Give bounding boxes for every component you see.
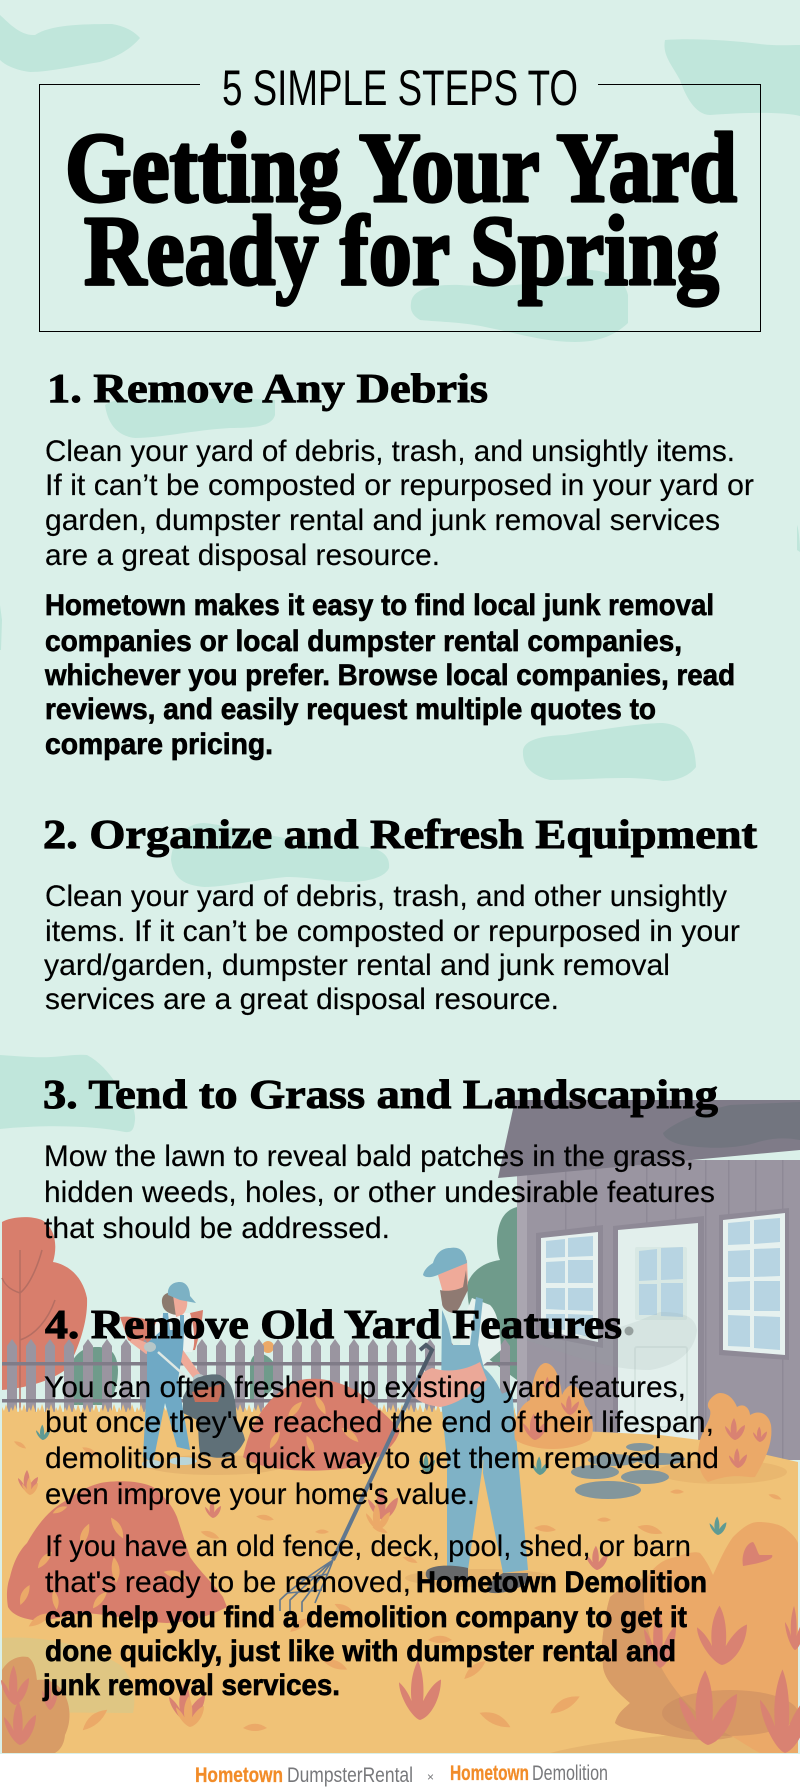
kicker: 5 simple steps to: 5 SIMPLE STEPS TO — [222, 60, 578, 116]
right window — [719, 1208, 789, 1360]
section 4 paragraph 2: If you have an old fence, deck, pool, shed, or barn — [45, 1530, 691, 1563]
section 4: remove old yard features — [42, 1301, 719, 1702]
section 2 paragraph: services are a great disposal resource. — [45, 983, 559, 1016]
section 1 paragraph: garden, dumpster rental and junk removal services — [45, 504, 720, 537]
section 3 paragraph: Mow the lawn to reveal bald patches in the grass, — [44, 1140, 694, 1173]
picket fence — [2, 1339, 517, 1412]
section 4 paragraph 1 — [44, 1371, 719, 1511]
door handle — [624, 1326, 634, 1336]
section 1 paragraph: If it can’t be composted or repurposed in your yard or — [45, 469, 754, 502]
section 1 paragraph: Clean your yard of debris, trash, and unsightly items. — [45, 435, 735, 468]
green bushes — [65, 1207, 517, 1405]
orange shrubs near house — [514, 1363, 771, 1482]
logo: hometown dumpster rental — [195, 1764, 413, 1787]
red tree — [2, 1217, 87, 1410]
roof — [498, 1100, 800, 1178]
background blobs — [0, 15, 800, 1132]
section 4 paragraph 1: even improve your home's value. — [45, 1478, 475, 1511]
section 1 bold callout — [44, 589, 735, 761]
door — [525, 1216, 704, 1445]
gardener man — [280, 1248, 528, 1613]
house — [498, 1100, 800, 1460]
scattered leaves — [13, 1439, 782, 1733]
section 4 heading: 4. Remove Old Yard Features — [45, 1301, 622, 1347]
title frame — [40, 84, 760, 332]
section 2 paragraph: Clean your yard of debris, trash, and other unsightly — [45, 880, 727, 913]
section 1 bold callout: compare pricing. — [45, 728, 273, 761]
footer logos — [195, 1762, 608, 1787]
illustration: spring yard scene — [1, 1100, 800, 1753]
translucent blob over ground — [2, 1637, 134, 1713]
red foliage behind gardener — [120, 1310, 203, 1352]
section 2 heading: 2. Organize and Refresh Equipment — [43, 811, 757, 857]
bottom-left bush — [1, 1657, 70, 1753]
section 1 paragraph: are a great disposal resource. — [45, 539, 440, 572]
section 2 paragraph — [44, 880, 740, 1016]
gardener woman — [130, 1282, 205, 1468]
section 1 bold callout: Hometown makes it easy to find local junk removal — [45, 589, 714, 622]
section 2 paragraph: items. If it can’t be composted or repurposed in your — [45, 915, 740, 948]
orange sprouts — [22, 1477, 390, 1727]
section 2: organize and refresh equipment — [43, 811, 757, 1016]
orange flower — [262, 1341, 274, 1353]
section 3 paragraph: that should be addressed. — [44, 1212, 390, 1245]
teal plants — [36, 1425, 726, 1535]
main title line 2: Ready for Spring — [84, 195, 719, 306]
small red sprouts — [17, 1470, 608, 1722]
section 4 paragraph 2: Hometown Demolition — [416, 1566, 707, 1599]
trash bag — [183, 1374, 245, 1458]
section 4 paragraph 2 — [42, 1530, 707, 1702]
logo: hometown demolition: Hometown — [450, 1762, 529, 1785]
section 1 bold callout: whichever you prefer. Browse local companies, read — [44, 659, 735, 692]
section 1: remove any debris — [44, 365, 754, 761]
section 3 heading: 3. Tend to Grass and Landscaping — [43, 1071, 719, 1117]
section 1 bold callout: reviews, and easily request multiple quotes to — [45, 693, 656, 726]
title — [65, 60, 737, 306]
section 4 paragraph 1: demolition is a quick way to get them removed and — [45, 1442, 719, 1475]
section 1 bold callout: companies or local dumpster rental companies, — [45, 625, 682, 658]
section 3 paragraph — [44, 1140, 715, 1245]
section 3 paragraph: hidden weeds, holes, or other undesirable features — [44, 1176, 715, 1209]
section 3: tend to grass and landscaping — [43, 1071, 719, 1245]
left window — [536, 1225, 603, 1348]
leaf pile small — [243, 1379, 400, 1471]
logo: hometown demolition — [450, 1762, 608, 1785]
logo: hometown dumpster rental: Hometown — [195, 1764, 283, 1787]
section 1 heading: 1. Remove Any Debris — [47, 365, 488, 411]
logo: hometown dumpster rental: DumpsterRental — [287, 1764, 413, 1787]
separator: × — [427, 1770, 434, 1784]
section 4 paragraph 2: that's ready to be removed, — [45, 1566, 411, 1599]
section 4 paragraph 2: junk removal services. — [42, 1669, 340, 1702]
section 2 paragraph: yard/garden, dumpster rental and junk removal — [44, 949, 670, 982]
logo: hometown demolition: Demolition — [532, 1762, 608, 1785]
section 4 paragraph 1: You can often freshen up existing yard features, — [44, 1371, 686, 1404]
section 4 paragraph 2: can help you find a demolition company to get it — [45, 1601, 687, 1634]
large orange bush bottom right — [602, 1522, 800, 1753]
section 4 paragraph 2: done quickly, just like with dumpster rental and — [45, 1635, 676, 1668]
section 4 paragraph 1: but once they've reached the end of their lifespan, — [45, 1406, 714, 1439]
ground — [2, 1400, 798, 1753]
leaf pile large — [7, 1481, 227, 1623]
stepping stones — [571, 1443, 685, 1499]
section 1 paragraph — [45, 435, 754, 572]
